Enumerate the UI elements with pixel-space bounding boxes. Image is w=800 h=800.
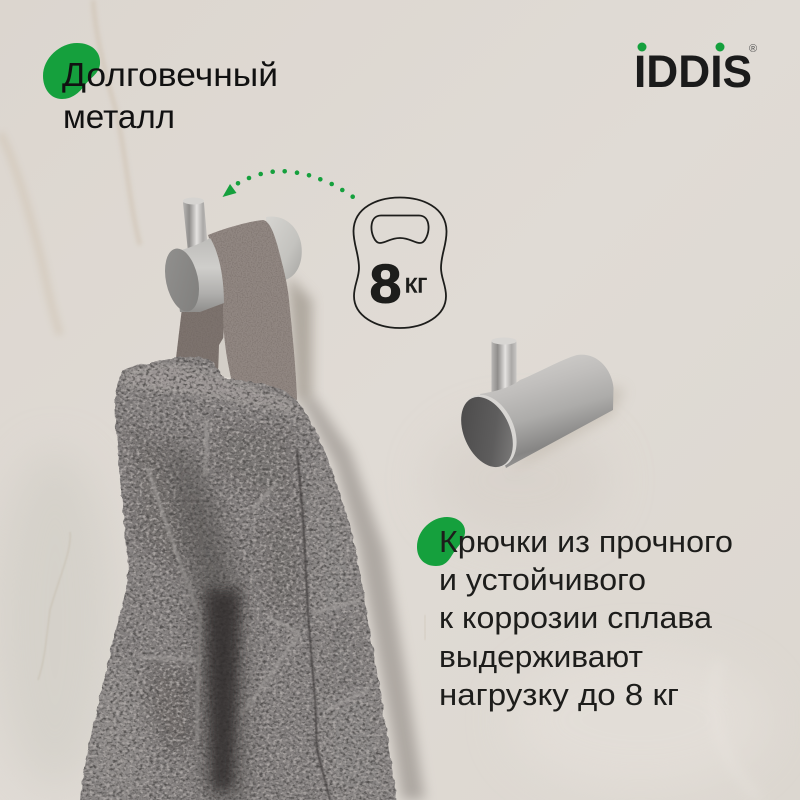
heading: durable metal: Долговечный	[62, 56, 278, 93]
description text	[417, 517, 733, 712]
hook 2 end face	[451, 386, 527, 476]
gap of wall behind strap	[218, 335, 232, 378]
heading accent blob	[43, 43, 100, 99]
towel	[70, 350, 425, 800]
hook 2	[451, 338, 625, 476]
arrow: dotted arc to the hook	[222, 169, 355, 199]
description text: выдерживают	[439, 639, 643, 674]
heading: durable metal	[43, 43, 278, 135]
kettlebell handle hole	[371, 216, 429, 243]
hook 1 barrel	[172, 238, 224, 312]
towel body	[70, 350, 410, 800]
towel pile shading patches	[129, 427, 188, 572]
icon: kettlebell 8 kg: кг	[404, 268, 428, 298]
description text: нагрузку до 8 кг	[439, 677, 679, 712]
hook 1 wall mount	[266, 216, 302, 282]
hook 1 shadow	[288, 275, 312, 400]
description text: Крючки из прочного	[439, 524, 733, 559]
hook 2 peg	[492, 339, 516, 397]
heading: durable metal: металл	[63, 98, 175, 135]
towel seams and folds	[140, 420, 367, 800]
icon: kettlebell 8 kg: 8	[370, 252, 402, 314]
hook 1 with towel strap	[160, 198, 312, 400]
hook 1 peg	[183, 199, 208, 252]
hook 2 shadow	[510, 385, 625, 472]
description text: и устойчивого	[439, 562, 646, 597]
logo: IDDIS: IDDIS	[634, 46, 752, 97]
hook 1 end face	[160, 245, 204, 315]
icon: kettlebell 8 kg	[354, 198, 447, 328]
logo: IDDIS: ®	[749, 43, 757, 55]
strap front	[208, 220, 297, 400]
back of towel strap	[176, 302, 225, 380]
towel shadow	[300, 398, 425, 800]
hook 2 barrel	[480, 355, 614, 468]
description text: к коррозии сплава	[439, 600, 713, 635]
arrowhead	[222, 184, 236, 197]
description accent blob	[417, 517, 465, 566]
